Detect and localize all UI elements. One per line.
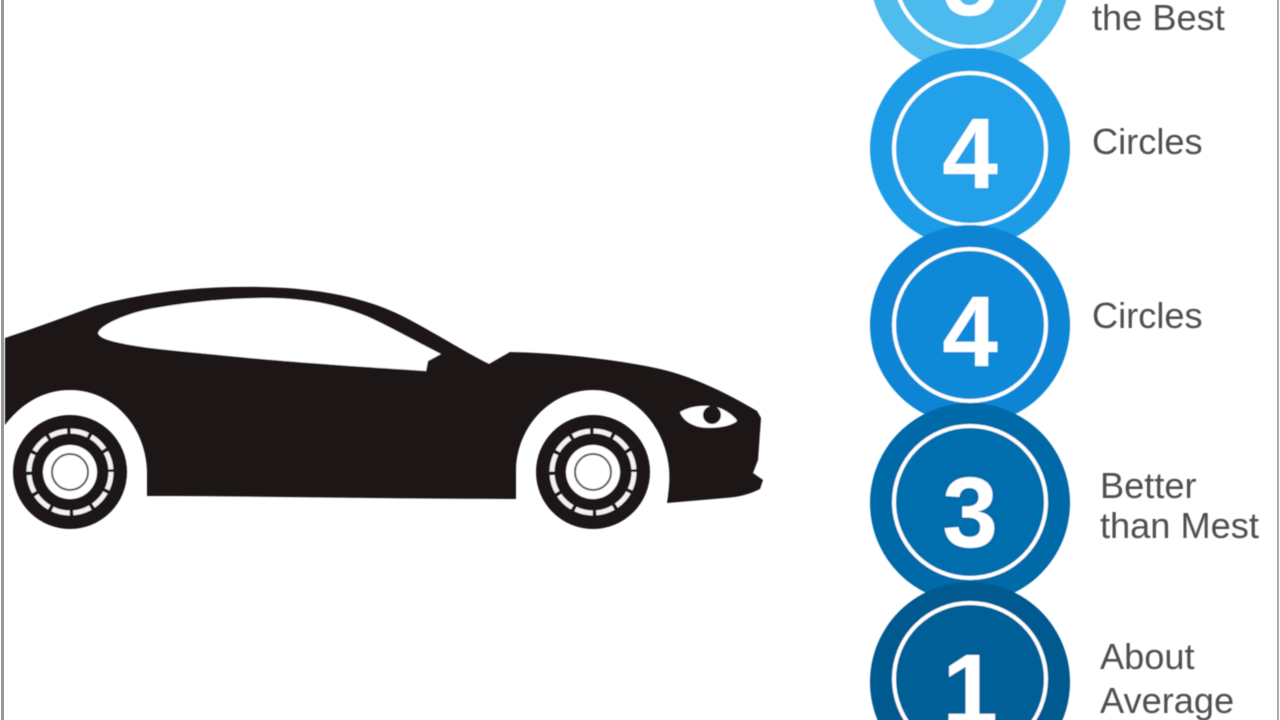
icon: black sports car: [5, 287, 763, 529]
front wheel: [536, 415, 650, 529]
label: Better than Mest: [1100, 465, 1259, 546]
rating circle: 3: [870, 403, 1070, 603]
rating circle: 1: [870, 582, 1070, 720]
label: About Average: [1100, 636, 1234, 720]
rating circle: 4: 4: [942, 98, 998, 210]
car headlight: [680, 406, 737, 428]
rating circle: 4: 4: [942, 276, 998, 388]
label: Better than Mest: than Mest: [1100, 505, 1259, 546]
car window: [98, 298, 441, 371]
label: About Average: Average: [1100, 680, 1234, 720]
rating labels: [1092, 0, 1259, 720]
label: Circles: Circles: [1092, 295, 1203, 336]
car body: [5, 287, 763, 503]
rating circle: top (cropped): [870, 0, 1070, 73]
rear wheel: [13, 415, 127, 529]
rating circle: 4: [870, 48, 1070, 248]
rating circles column: [870, 0, 1070, 720]
label: About Average: About: [1100, 636, 1195, 677]
label: Better than Mest: Better: [1100, 465, 1197, 506]
rating circle: 3: 3: [942, 457, 998, 569]
label: Circles: Circles: [1092, 121, 1203, 162]
rating circle: 4: [870, 225, 1070, 425]
